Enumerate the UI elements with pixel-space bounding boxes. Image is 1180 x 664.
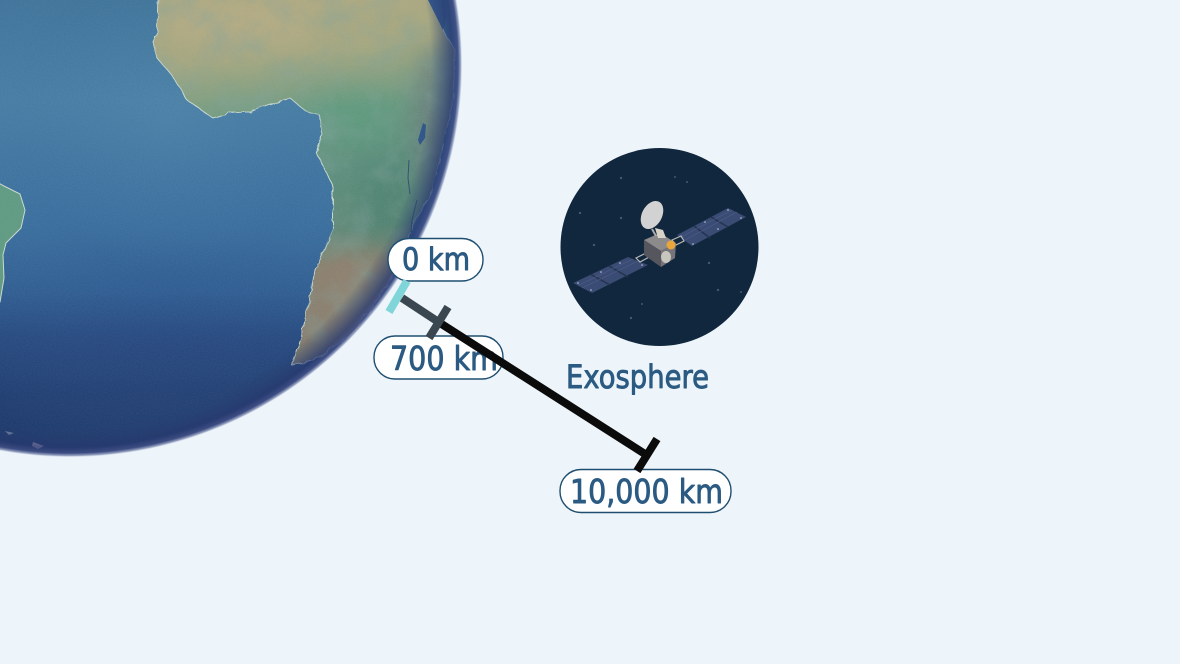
lakes (418, 123, 426, 145)
stars (579, 176, 742, 319)
heading: Exosphere: Exosphere (566, 358, 709, 396)
solar panel left (573, 257, 648, 293)
label: 0 km (388, 238, 483, 281)
surface marker (389, 281, 407, 312)
line: exosphere range (440, 323, 657, 471)
Africa (150, 0, 464, 370)
label: 700 km: 700 km (390, 339, 498, 378)
dish (636, 197, 668, 233)
arm right (672, 236, 684, 245)
panel: satellite in space (560, 148, 758, 346)
South America (0, 181, 25, 302)
globe (0, 0, 464, 457)
satellite body (644, 228, 676, 267)
label: 0 km: 0 km (402, 242, 470, 278)
space circle (560, 148, 758, 346)
Red Sea corner (428, 0, 445, 30)
line: lower atmosphere range (402, 298, 448, 338)
solar panel right (677, 208, 746, 246)
Antarctic fragments (32, 442, 44, 449)
arm left (636, 252, 651, 262)
label: 10,000 km: 10,000 km (570, 472, 723, 511)
